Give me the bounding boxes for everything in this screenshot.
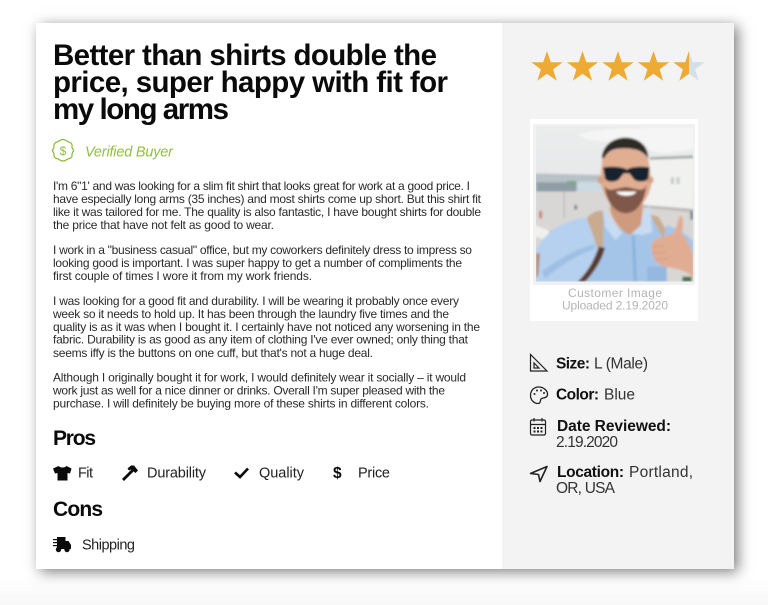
backpack straps [587, 211, 606, 248]
icon: palette [530, 387, 548, 404]
detail: size: Size: [556, 356, 590, 372]
title [53, 39, 449, 126]
photo caption: Uploaded 2.19.2020 [562, 298, 668, 312]
detail: location: OR, USA [556, 480, 616, 497]
icon: check mark [235, 468, 248, 477]
icon: verified badge with dollar: $ [60, 144, 67, 158]
icon: set square [530, 354, 547, 371]
title: my long arms [53, 93, 229, 126]
detail: color: Color: [556, 386, 599, 404]
paragraph 2 [53, 243, 472, 283]
detail: location: Portland, [629, 464, 693, 481]
paragraph 3 [52, 294, 480, 360]
pro: quality: Quality [259, 466, 305, 482]
polaroid frame [530, 119, 698, 321]
detail: size [530, 354, 648, 372]
detail: color [530, 386, 635, 404]
verified label: Verified Buyer [85, 144, 174, 160]
icon: hammer [122, 466, 138, 481]
paragraph 2: first couple of times I wore it from my work friends. [53, 269, 312, 283]
detail: location: Location: [557, 464, 624, 481]
pro: price: Price [358, 466, 390, 482]
icon: star 2 [567, 51, 598, 81]
star rating [531, 51, 705, 81]
product details [530, 354, 693, 497]
icon: fast truck [53, 537, 71, 552]
icon: star 5 half filled [673, 51, 705, 81]
detail: date reviewed: Date Reviewed: [557, 418, 671, 435]
shirt [585, 214, 694, 282]
photo caption: Customer Image [568, 286, 662, 300]
detail: color: Blue [604, 386, 635, 404]
pro: fit: Fit [78, 466, 93, 482]
paragraph 4 [52, 370, 466, 410]
paragraph 3: seems iffy is the buttons on one cuff, but that's not a huge deal. [53, 346, 373, 360]
paragraph 4: Although I originally bought it for work, I would definitely wear it socially – it would [53, 370, 466, 384]
paragraph 3: week so it needs to hold up. It has been through the laundry five times and the [52, 307, 449, 321]
hair [602, 138, 648, 158]
icon: star 4 [638, 51, 669, 81]
icon: navigation arrow [530, 466, 547, 482]
detail: size: L (Male) [594, 356, 648, 372]
verified buyer badge [52, 140, 174, 161]
paragraph 3: quality is as it was when I bought it. I certainly have not noticed any worsening in the [53, 320, 480, 334]
panel: sidebar background [502, 23, 734, 569]
icon: star 3 [602, 51, 634, 81]
pro: price [333, 465, 390, 482]
icon: dollar: $ [333, 465, 342, 482]
neck [610, 203, 643, 235]
icon: calendar [530, 418, 546, 435]
title: price, super happy with fit for [53, 66, 449, 99]
detail: date reviewed [530, 418, 671, 451]
pro: durability: Durability [147, 466, 207, 482]
title: Better than shirts double the [53, 39, 437, 72]
paragraph 1 [53, 179, 482, 232]
paragraph 1: have especially long arms (35 inches) and most shirts come up short. But this shirt fit [53, 192, 482, 206]
dark strap [578, 247, 605, 282]
left arm cut [536, 253, 540, 278]
beard [604, 185, 646, 213]
paragraph 3: fabric. Durability is as good as any item of clothing I've ever owned; only thing that [53, 332, 469, 346]
heading: pros: Pros [53, 427, 96, 450]
heading: cons: Cons [53, 498, 103, 521]
paragraph 2: looking good is important. I was super happy to get a number of compliments the [53, 256, 462, 270]
customer photo card [530, 119, 698, 321]
detail: date reviewed: 2.19.2020 [556, 434, 618, 451]
pros list [53, 465, 390, 482]
paragraph 4: work just as well for a nice dinner or drinks. Overall I'm super pleased with the [52, 384, 445, 398]
sunglasses [603, 167, 650, 182]
paragraph 1: I'm 6"1' and was looking for a slim fit shirt that looks great for work at a good price. I [53, 179, 470, 193]
detail: location [530, 464, 693, 497]
con: shipping [53, 537, 135, 554]
head [600, 148, 652, 213]
hand [651, 216, 693, 278]
pro: durability [122, 466, 207, 482]
paragraph 1: the price that have not felt as good to wear. [53, 218, 274, 232]
pro: fit [53, 466, 93, 482]
paragraph 2: I work in a "business casual" office, but my coworkers definitely dress to impress so [53, 243, 472, 257]
con: shipping: Shipping [82, 538, 135, 554]
paragraph 3: I was looking for a good fit and durability. I will be wearing it probably once every [53, 294, 459, 308]
photo: smiling man in blue shirt giving thumbs up [536, 136, 694, 282]
icon: star 1 [531, 51, 563, 81]
review text [52, 179, 482, 410]
icon: t-shirt [53, 466, 72, 480]
paragraph 4: purchase. I will definitely be buying more of these shirts in different colors. [53, 396, 429, 410]
pro: quality [235, 466, 305, 482]
paragraph 1: like it was tailored for me. The quality is also fantastic, I have bought shirts for double [53, 205, 481, 219]
photo caption [562, 286, 668, 312]
